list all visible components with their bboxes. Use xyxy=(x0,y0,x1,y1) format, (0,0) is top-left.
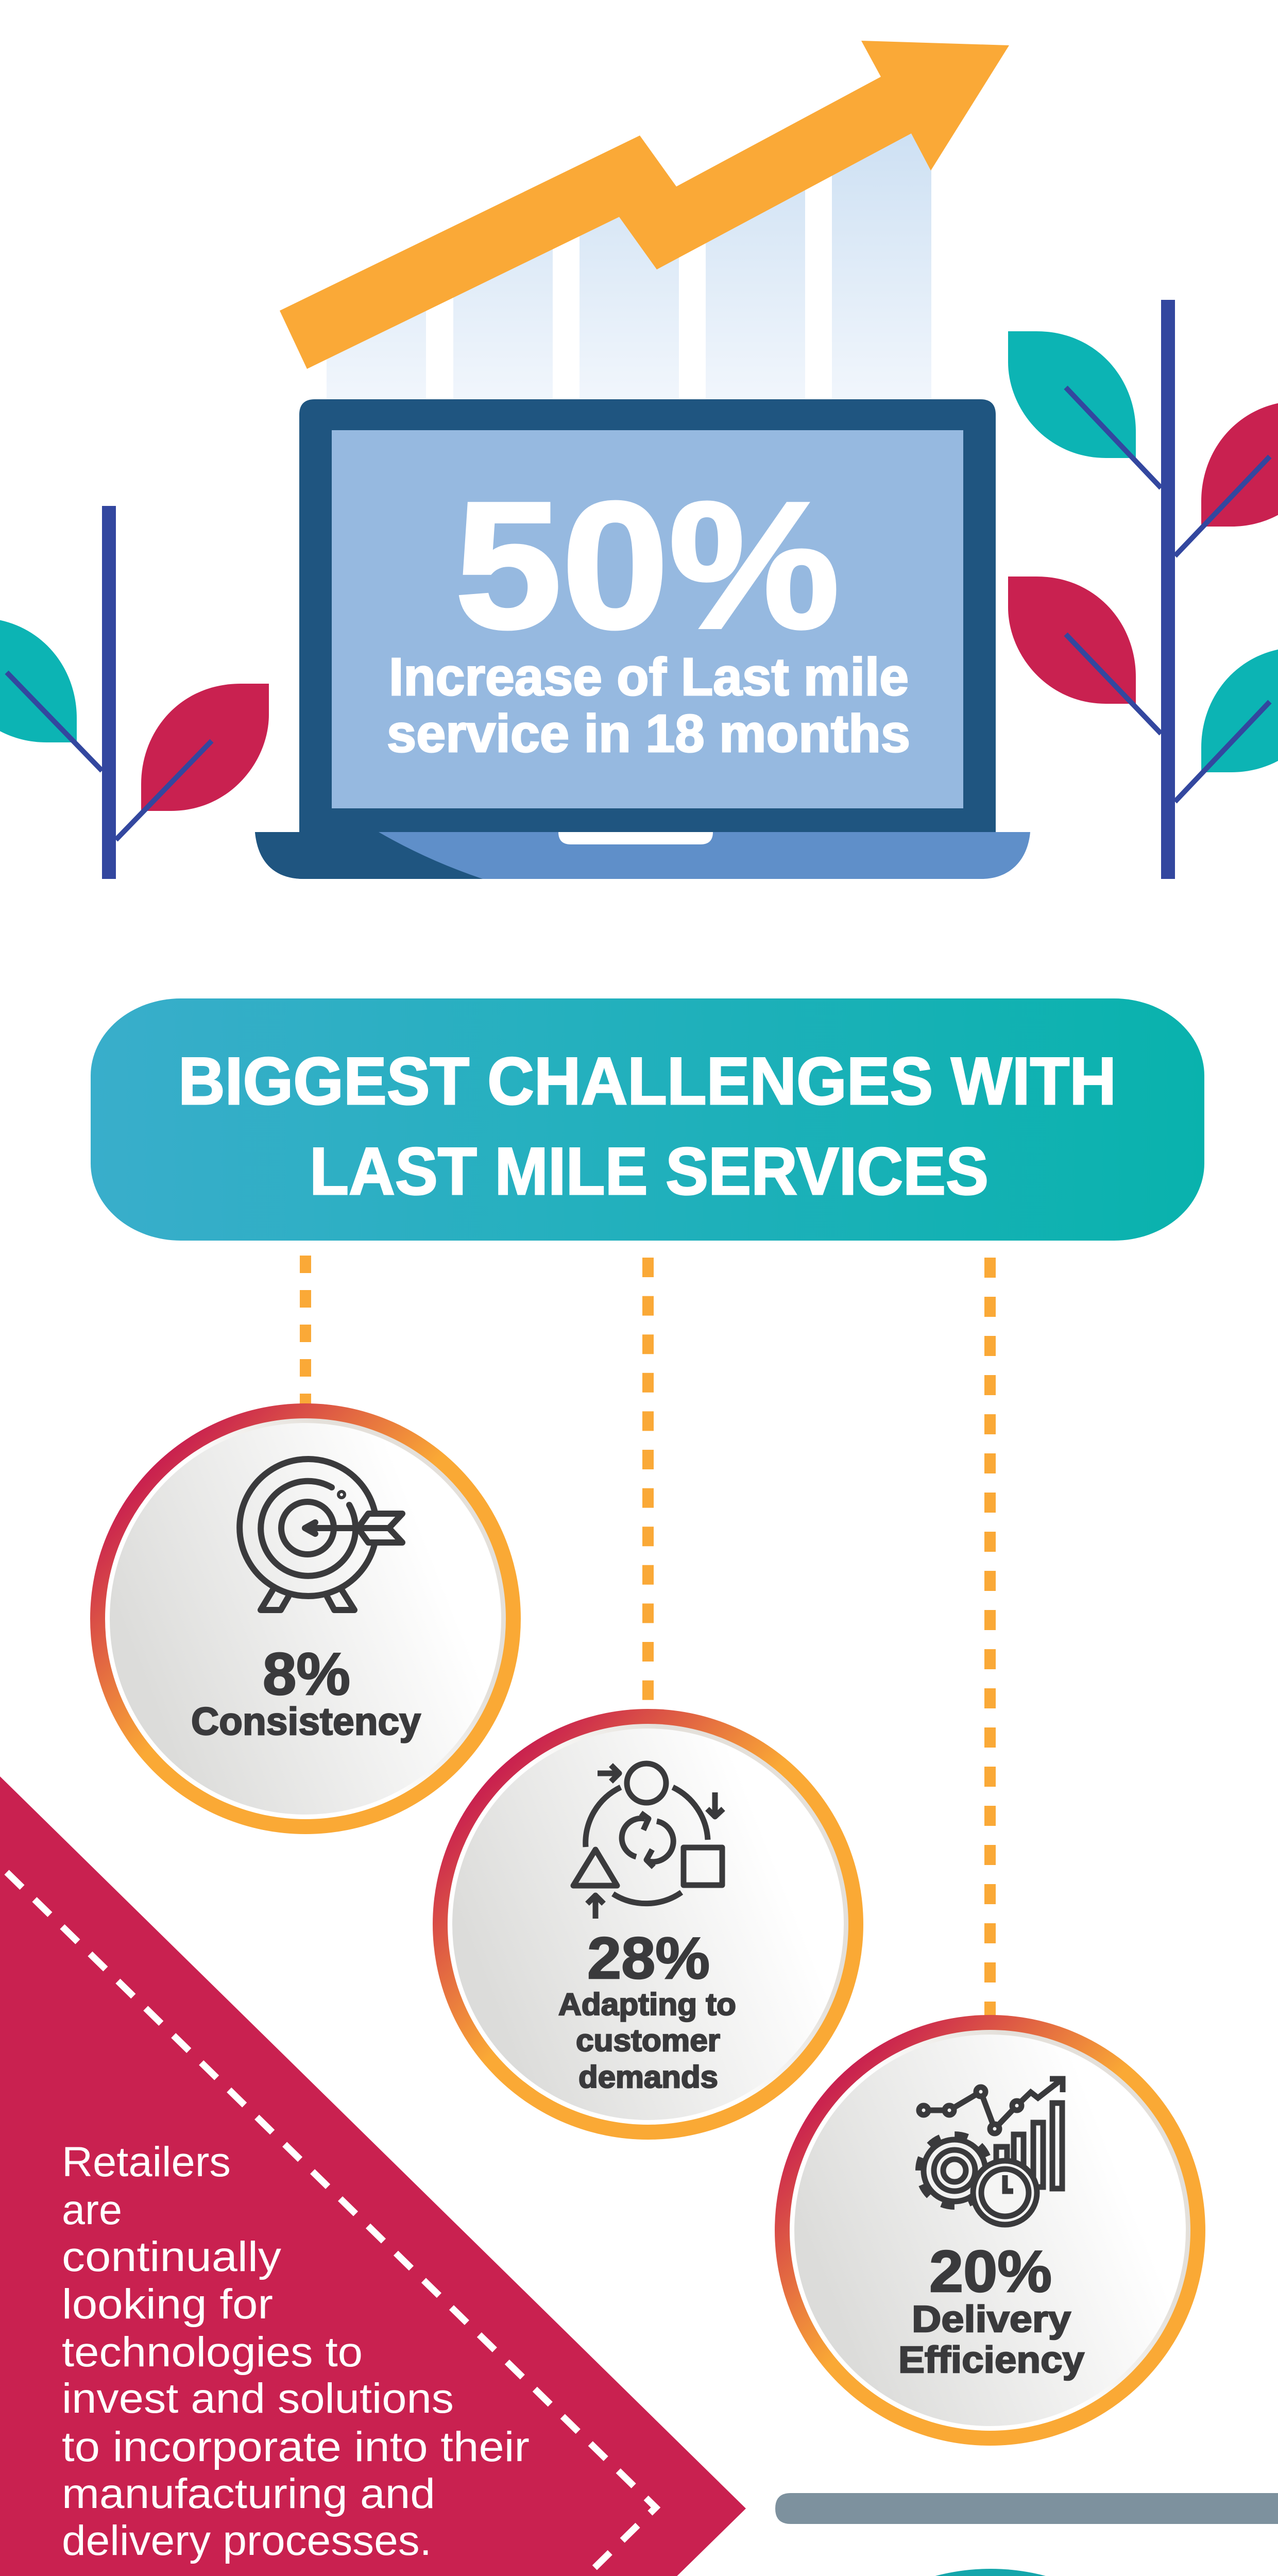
intro text: Retailers xyxy=(62,2139,231,2185)
intro text: technologies to xyxy=(62,2329,363,2376)
panel: intro triangle xyxy=(0,1776,746,2576)
intro text: invest and solutions xyxy=(62,2375,454,2422)
circle: consistency: 8% xyxy=(263,1640,350,1707)
subheadline: service in 18 months xyxy=(387,704,910,763)
heading banner xyxy=(91,998,1204,1241)
bar chart behind arrow xyxy=(327,118,931,399)
subheadline: Increase of Last mile xyxy=(389,647,909,706)
circle: adapting: Adapting to xyxy=(558,1987,736,2022)
circle: adapting: 28% xyxy=(587,1926,710,1991)
circle: delivery efficiency: Delivery xyxy=(912,2299,1071,2340)
icon: cycle of shapes xyxy=(573,1764,723,1919)
circle: consistency xyxy=(90,1403,521,1834)
circle: delivery efficiency: Efficiency xyxy=(898,2340,1084,2381)
intro text xyxy=(61,2139,530,2576)
circle: adapting xyxy=(433,1709,863,2140)
circle: delivery efficiency xyxy=(775,2015,1205,2446)
circle: transport management xyxy=(775,2569,1206,2576)
heading banner: LAST MILE SERVICES xyxy=(310,1133,989,1209)
plant: left xyxy=(0,506,269,879)
headline: 50%: 50% xyxy=(455,465,840,666)
heading banner: BIGGEST CHALLENGES WITH xyxy=(178,1043,1116,1118)
connector lines: challenges xyxy=(305,1256,990,2020)
circle: adapting: customer xyxy=(576,2023,720,2058)
divider bar xyxy=(775,2493,1278,2524)
icon: target xyxy=(240,1459,402,1610)
circle: delivery efficiency: 20% xyxy=(929,2239,1052,2304)
subheadline xyxy=(387,647,910,763)
arrow: growth xyxy=(280,41,1009,369)
icon: chart with gear and clock xyxy=(918,2079,1063,2225)
intro text: manufacturing and xyxy=(62,2470,435,2517)
intro text: continually xyxy=(62,2233,281,2280)
intro text: looking for xyxy=(62,2281,273,2328)
circle: consistency: Consistency xyxy=(191,1700,421,1743)
intro text: to incorporate into their xyxy=(62,2424,530,2470)
plant: right xyxy=(1008,300,1278,879)
intro text: delivery processes. xyxy=(62,2517,432,2564)
laptop xyxy=(255,399,1030,879)
circle: adapting: demands xyxy=(578,2060,718,2094)
intro text: are xyxy=(62,2187,122,2233)
